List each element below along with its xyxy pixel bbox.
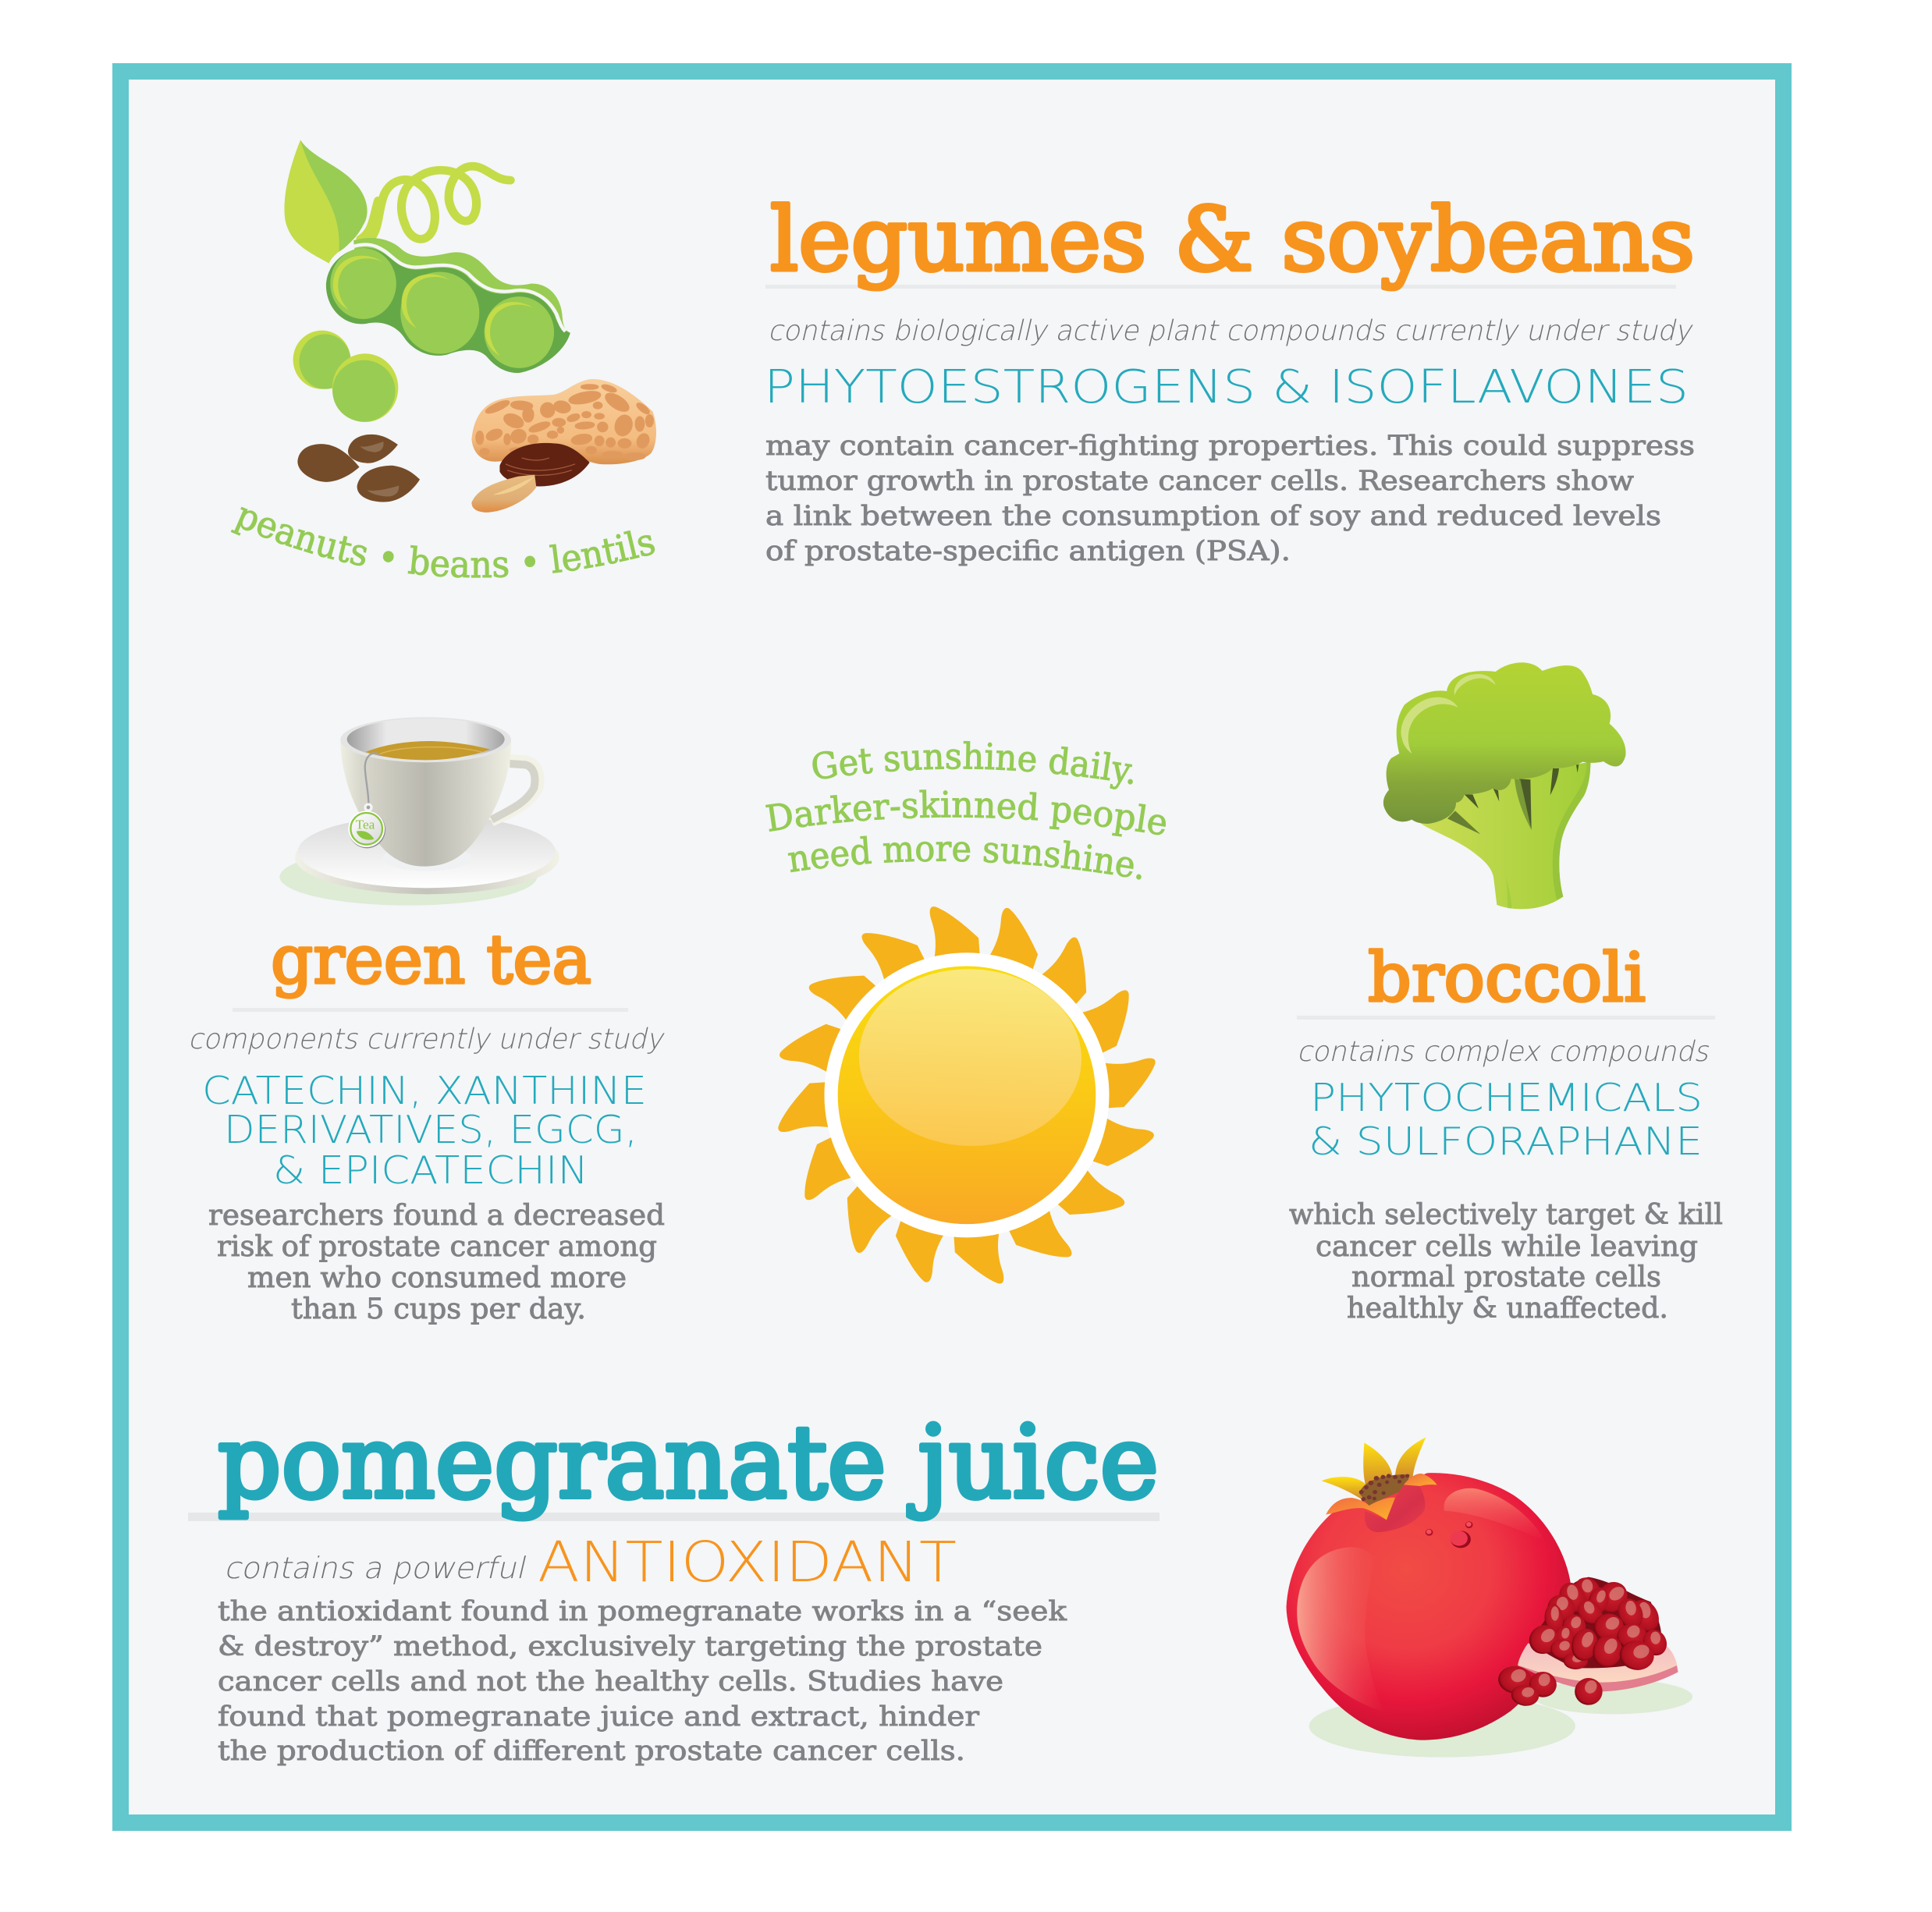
- stalk: [1420, 762, 1590, 909]
- curved sunshine caption: [765, 741, 1166, 880]
- heading: green tea: green tea: [271, 921, 591, 999]
- cup: [340, 741, 511, 867]
- heading: broccoli: [1297, 939, 1715, 1020]
- panel: pomegranate juice: [188, 1405, 1692, 1767]
- body text: tumor growth in prostate cancer cells. Researchers show: [765, 466, 1634, 497]
- cup rim and tea: [340, 717, 511, 762]
- compound heading: [202, 1069, 647, 1193]
- body text: researchers found a decreased: [208, 1200, 665, 1232]
- saucer: [295, 815, 559, 894]
- panel: sunshine: [765, 741, 1166, 1284]
- curved caption: peanuts beans lentils: peanuts • beans • lentils: [231, 507, 655, 578]
- floret highlights: [1401, 674, 1496, 754]
- panel: green tea: [186, 717, 669, 1325]
- heading: legumes and soybeans: legumes & soybeans: [770, 190, 1695, 291]
- body text: a link between the consumption of soy and reduced levels: [765, 501, 1661, 532]
- body text: the production of different prostate cancer cells.: [218, 1736, 965, 1767]
- body text: cancer cells while leaving: [1316, 1231, 1698, 1263]
- icon: broccoli: [1383, 662, 1626, 909]
- shadow: [279, 848, 537, 906]
- panel: broccoli: [1289, 662, 1723, 1325]
- body text: found that pomegranate juice and extract, hinder: [218, 1701, 979, 1733]
- icon: pomegranate: [1287, 1438, 1692, 1758]
- page frame: [120, 72, 1784, 1822]
- compound heading: & EPICATECHIN: [273, 1148, 588, 1193]
- crown: [1322, 1438, 1437, 1532]
- curved sunshine caption: Darker-skinned people: [765, 789, 1166, 837]
- body text: than 5 cups per day.: [291, 1293, 586, 1325]
- body text: risk of prostate cancer among: [217, 1231, 657, 1263]
- body text: healthly & unaffected.: [1347, 1293, 1668, 1325]
- panel: legumes and soybeans: [231, 140, 1697, 578]
- italic subheading: contains a powerful: [222, 1551, 531, 1586]
- heading: broccoli: broccoli: [1368, 939, 1646, 1017]
- fruit highlights: [1297, 1488, 1545, 1712]
- shadows: [1309, 1680, 1692, 1758]
- body text: & destroy” method, exclusively targeting the prostate: [218, 1631, 1042, 1662]
- body text: men who consumed more: [247, 1262, 627, 1294]
- body text: normal prostate cells: [1351, 1261, 1661, 1293]
- italic subheading: contains biologically active plant compounds currently under study: [766, 314, 1697, 347]
- icon: sun: [778, 906, 1156, 1284]
- loose peas: [293, 331, 398, 422]
- seed cluster backing: [1531, 1577, 1661, 1668]
- peanut: [471, 379, 656, 513]
- sun highlight: [856, 965, 1085, 1150]
- tea bag string: [365, 753, 380, 805]
- italic subheading: contains complex compounds: [1295, 1034, 1714, 1068]
- curved sunshine caption: Get sunshine daily.: [812, 741, 1133, 789]
- compound heading: DERIVATIVES, EGCG,: [224, 1108, 637, 1152]
- brown seeds: [297, 435, 420, 502]
- floret head: [1383, 662, 1626, 824]
- antioxidant label: ANTIOXIDANT: [538, 1530, 957, 1595]
- body text: [208, 1200, 665, 1325]
- fruit body: [1287, 1473, 1572, 1740]
- tea bag tag: [348, 803, 385, 848]
- body text: may contain cancer-fighting properties. This could suppress: [765, 431, 1695, 462]
- sun disc: [824, 952, 1110, 1237]
- body text: [218, 1596, 1067, 1767]
- icon: tea cup on saucer: [279, 717, 559, 906]
- body text: [765, 431, 1695, 567]
- compound heading: & SULFORAPHANE: [1309, 1119, 1703, 1164]
- tea bag tag: Tea: [356, 818, 375, 832]
- handle: [492, 759, 539, 821]
- cut wedge: [1518, 1644, 1678, 1691]
- leaf: [285, 140, 368, 264]
- body text: the antioxidant found in pomegranate works in a “seek: [218, 1596, 1067, 1627]
- italic subheading: components currently under study: [186, 1022, 669, 1055]
- compound heading: PHYTOCHEMICALS: [1310, 1076, 1703, 1120]
- pomegranate seeds: [1496, 1574, 1670, 1708]
- tendril: [360, 166, 510, 239]
- compound heading: PHYTOESTROGENS & ISOFLAVONES: [764, 360, 1689, 413]
- water drops: [1426, 1521, 1473, 1548]
- body text: cancer cells and not the healthy cells. Studies have: [218, 1666, 1003, 1697]
- pod: [326, 238, 570, 373]
- icon: soybean pod, peas, seeds and peanut: [285, 140, 656, 513]
- body text: which selectively target & kill: [1289, 1199, 1723, 1231]
- sun rays: [778, 906, 1156, 1284]
- heading: pomegranate juice: pomegranate juice: [218, 1405, 1159, 1521]
- compound heading: CATECHIN, XANTHINE: [202, 1069, 647, 1113]
- body text: of prostate-specific antigen (PSA).: [765, 536, 1291, 567]
- compound heading: [1309, 1076, 1703, 1164]
- body text: [1289, 1199, 1723, 1325]
- curved sunshine caption: need more sunshine.: [788, 835, 1142, 880]
